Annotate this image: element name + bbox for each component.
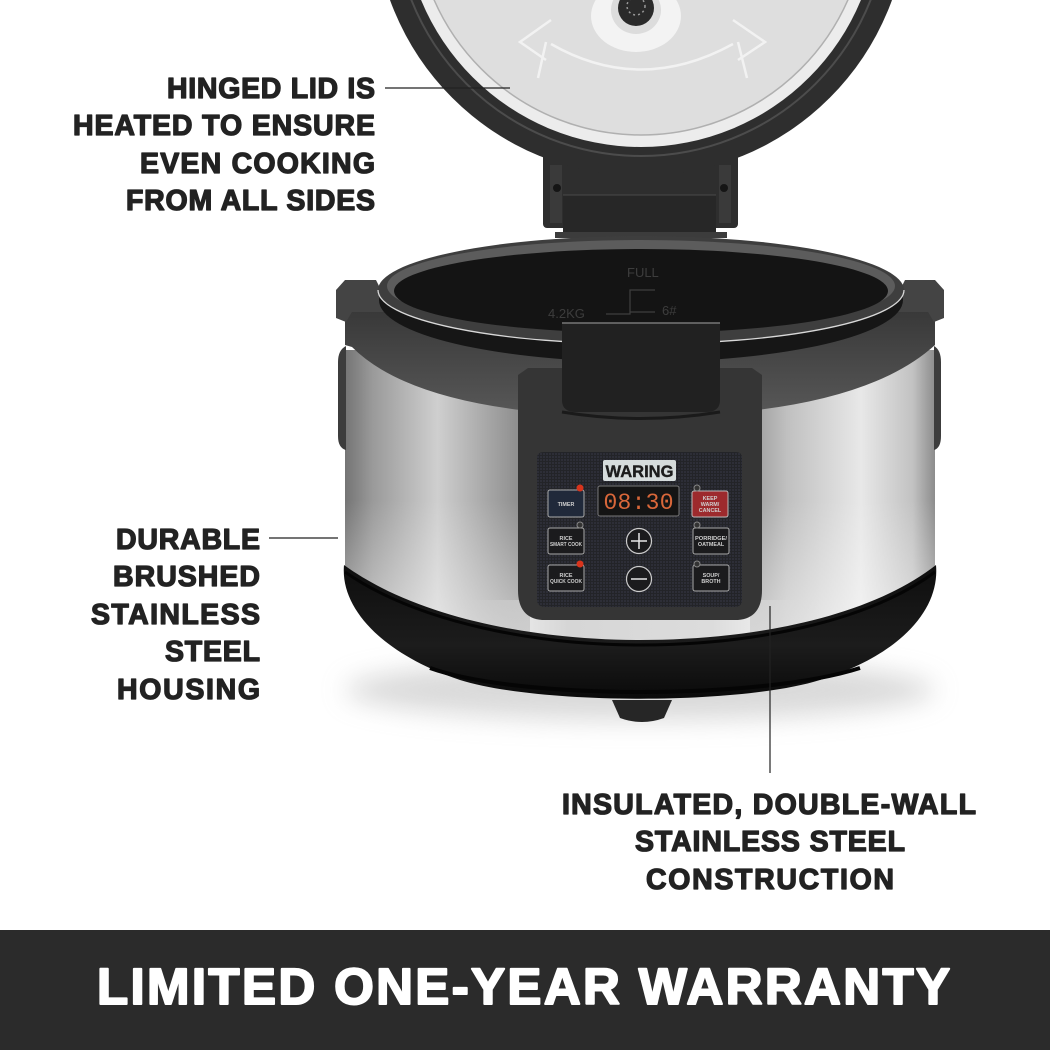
button: keep warm <box>692 485 728 517</box>
rim handle right <box>895 280 944 322</box>
button: timer: TIMER <box>558 502 574 508</box>
callout: double wall: INSULATED, DOUBLE-WALL <box>562 789 976 821</box>
rim handle left <box>336 280 386 322</box>
cooker body <box>336 236 944 722</box>
callout: hinged lid: HINGED LID IS <box>167 73 375 105</box>
leader line: housing <box>269 537 338 539</box>
callout: hinged lid: HEATED TO ENSURE <box>73 110 375 142</box>
callout: stainless housing: HOUSING <box>117 674 260 706</box>
button: timer <box>548 484 584 517</box>
black base <box>344 565 936 699</box>
button: rice quick cook: QUICK COOK <box>550 579 582 585</box>
callout: hinged lid: FROM ALL SIDES <box>126 185 375 217</box>
side handle right <box>934 346 941 450</box>
callout: double wall: STAINLESS STEEL <box>635 826 905 858</box>
button: soup: SOUP/ <box>703 573 720 579</box>
callout: stainless housing: STEEL <box>165 636 260 668</box>
button: plus <box>626 528 652 554</box>
button: porridge: PORRIDGE/ <box>695 536 728 542</box>
lid hinge <box>543 150 738 238</box>
button: keep warm: WARM/ <box>701 502 720 508</box>
control panel housing <box>518 345 762 620</box>
foot <box>612 700 672 722</box>
button: minus <box>626 566 652 592</box>
button: porridge <box>693 522 729 554</box>
button: rice smart cook: SMART COOK <box>550 542 582 548</box>
side handle left <box>338 346 346 450</box>
capacity markings: FULL <box>627 265 659 280</box>
callout: hinged lid <box>73 73 375 217</box>
button: rice smart cook <box>548 522 584 554</box>
drop shadow <box>345 660 935 720</box>
capacity markings <box>548 265 677 321</box>
callout: stainless housing <box>91 524 260 706</box>
callout: double wall <box>562 789 976 896</box>
warranty banner <box>0 930 1050 1050</box>
collar <box>345 262 935 410</box>
button: rice quick cook: RICE <box>560 573 573 579</box>
callout: stainless housing: BRUSHED <box>113 561 260 593</box>
latch <box>562 323 720 412</box>
button: keep warm: KEEP <box>703 496 718 502</box>
capacity markings: 6# <box>662 303 677 318</box>
button: keep warm: CANCEL <box>699 508 722 514</box>
capacity markings: 4.2KG <box>548 306 585 321</box>
button: rice quick cook <box>548 560 584 591</box>
logo: WARING <box>606 462 674 481</box>
time display: 08:30 <box>604 490 674 516</box>
stainless steel housing left <box>345 350 530 640</box>
callout: stainless housing: DURABLE <box>116 524 260 556</box>
leader line: lid <box>385 87 510 89</box>
button: rice smart cook: RICE <box>560 536 573 542</box>
button: soup: BROTH <box>701 579 721 585</box>
button: soup <box>693 561 729 591</box>
inner pot <box>378 236 904 362</box>
open hinged lid <box>374 0 908 238</box>
button: porridge: OATMEAL <box>698 542 725 548</box>
control panel <box>537 452 742 607</box>
callout: double wall: CONSTRUCTION <box>646 864 894 896</box>
callout: hinged lid: EVEN COOKING <box>140 148 375 180</box>
warranty text: LIMITED ONE-YEAR WARRANTY <box>97 958 950 1015</box>
stainless steel housing right <box>750 350 935 640</box>
leader line: double wall <box>769 606 771 773</box>
callout: stainless housing: STAINLESS <box>91 599 260 631</box>
